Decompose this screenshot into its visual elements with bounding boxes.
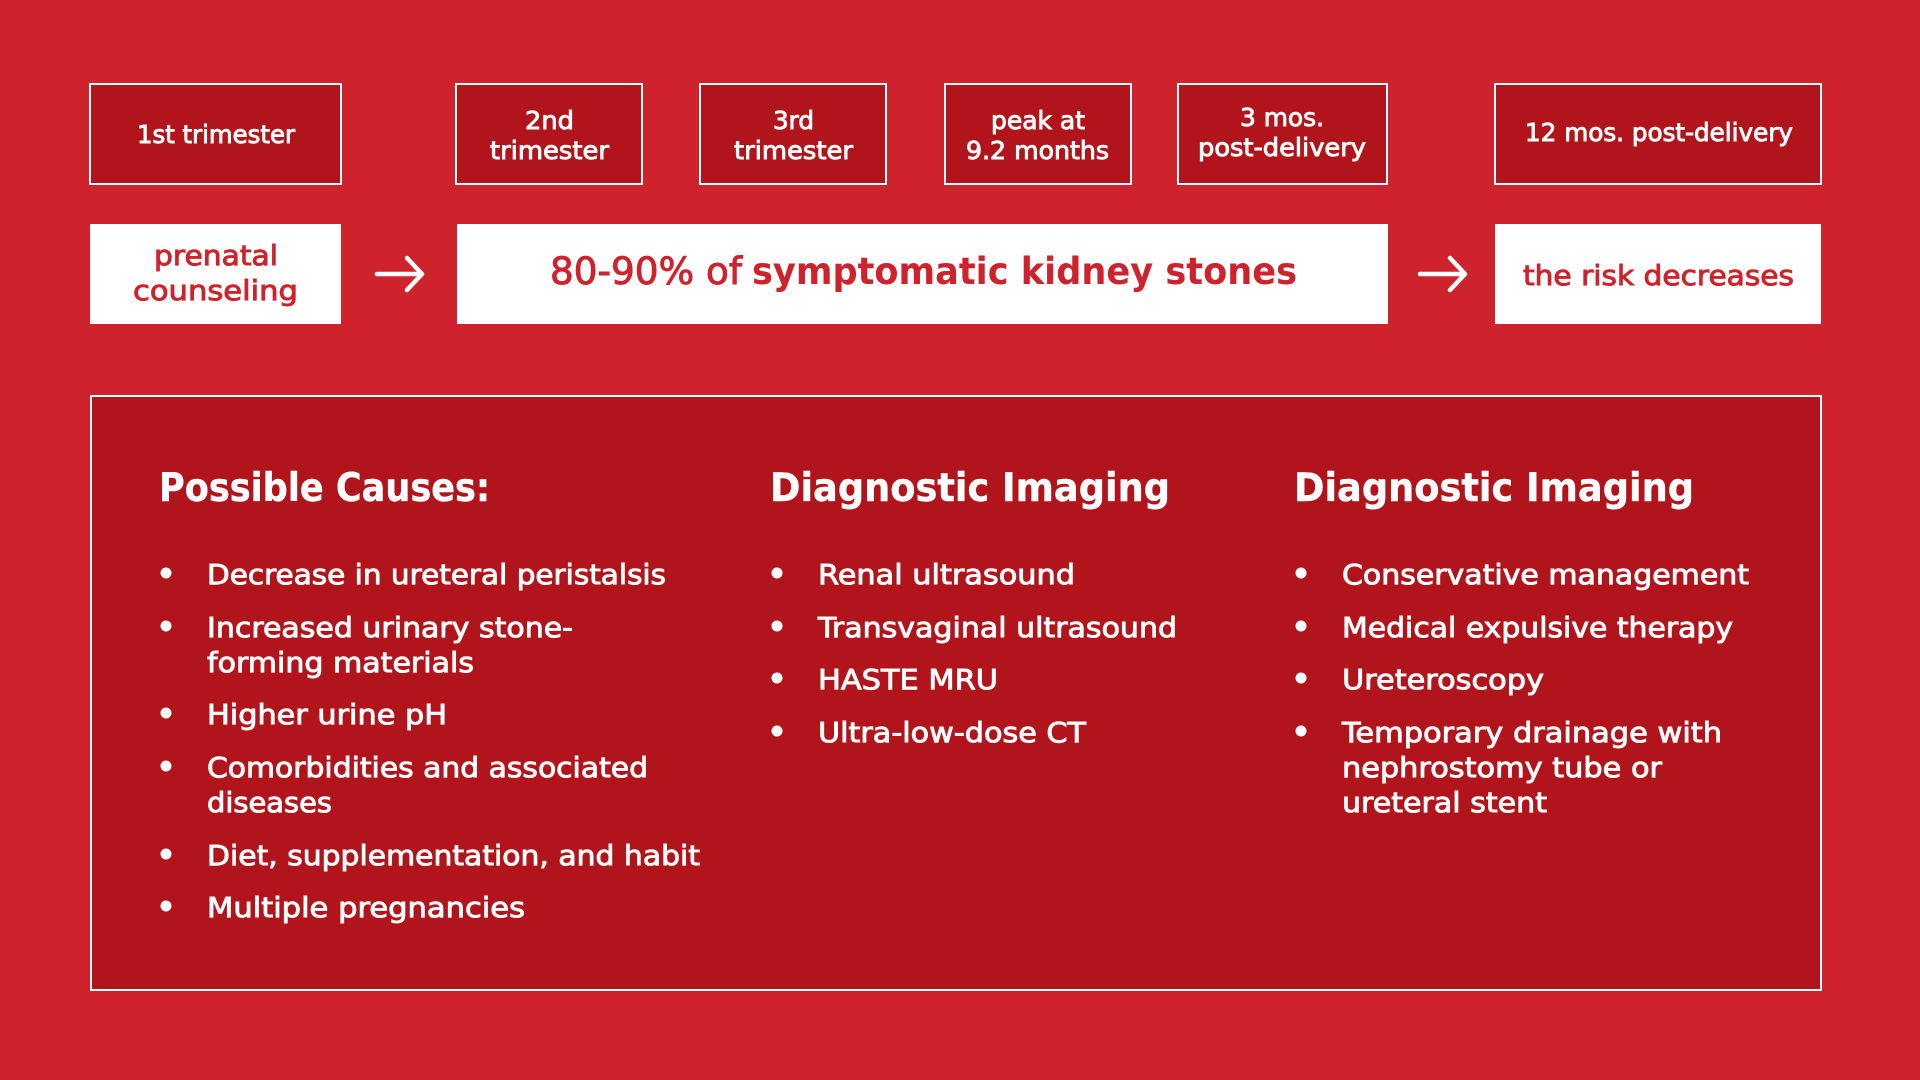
timeline label: 12 mos. post-delivery <box>1495 84 1821 184</box>
list: possible causes: Increased urinary stone- <box>207 611 573 644</box>
callout: 80-90% of symptomatic kidney stones <box>457 224 1388 324</box>
callout: the risk decreases: the risk decreases <box>1523 259 1794 292</box>
list: management options: Temporary drainage with <box>1341 716 1722 749</box>
callout: prenatal counseling: counseling <box>133 274 298 307</box>
timeline label: 1st trimester: 1st trimester <box>137 120 296 149</box>
heading: diagnostic imaging: Diagnostic Imaging <box>770 466 1170 511</box>
timeline label: peak at 9.2 months <box>945 84 1131 184</box>
arrow: counseling to symptomatic stones <box>377 258 422 290</box>
list: possible causes: Multiple pregnancies <box>207 891 525 924</box>
callout: 80-90% of symptomatic kidney stones: symptomatic kidney stones <box>752 250 1297 293</box>
callout: prenatal counseling <box>90 224 341 324</box>
list: imaging methods: Ultra-low-dose CT <box>818 716 1087 749</box>
list: possible causes <box>160 558 700 924</box>
list: management options: Conservative management <box>1342 558 1749 591</box>
callout: the risk decreases <box>1495 224 1821 324</box>
list: possible causes: Decrease in ureteral peristalsis <box>207 558 666 591</box>
list: management options: ureteral stent <box>1342 786 1547 819</box>
timeline label: 12 mos. post-delivery: 12 mos. post-delivery <box>1525 118 1793 147</box>
list: management options: nephrostomy tube or <box>1342 751 1663 784</box>
timeline label: 1st trimester <box>90 84 341 184</box>
timeline label: 3rd trimester <box>700 84 886 184</box>
list: imaging methods: Renal ultrasound <box>818 558 1075 591</box>
column: diagnostic imaging <box>770 466 1177 749</box>
list: possible causes: diseases <box>207 786 332 819</box>
list: possible causes: forming materials <box>207 646 474 679</box>
callout: 80-90% of symptomatic kidney stones: 80-90% of <box>550 250 743 293</box>
list: possible causes: Diet, supplementation, and habit <box>207 839 700 872</box>
timeline label: 3 mos. post-delivery <box>1178 84 1387 184</box>
panel: causes, imaging and management <box>91 396 1821 990</box>
timeline label: peak at 9.2 months: 9.2 months <box>966 136 1109 165</box>
timeline label: 2nd trimester <box>456 84 642 184</box>
heading: possible causes: Possible Causes: <box>159 466 490 511</box>
list: management options: Medical expulsive therapy <box>1342 611 1733 644</box>
list: possible causes: Higher urine pH <box>207 698 447 731</box>
timeline label: 3rd trimester: trimester <box>734 136 854 165</box>
list: management options <box>1296 558 1749 819</box>
list: management options: Ureteroscopy <box>1342 663 1544 696</box>
timeline label: 2nd trimester: trimester <box>490 136 610 165</box>
column: treatment <box>1294 466 1749 819</box>
timeline label: 3rd trimester: 3rd <box>773 106 814 135</box>
list: imaging methods <box>772 558 1177 749</box>
column: possible causes <box>159 466 700 924</box>
timeline label: 3 mos. post-delivery: post-delivery <box>1198 133 1366 162</box>
timeline label: peak at 9.2 months: peak at <box>991 106 1085 135</box>
heading: second diagnostic imaging: Diagnostic Imaging <box>1294 466 1694 511</box>
timeline label: 2nd trimester: 2nd <box>525 106 574 135</box>
list: imaging methods: HASTE MRU <box>818 663 998 696</box>
list: possible causes: Comorbidities and associated <box>207 751 648 784</box>
list: imaging methods: Transvaginal ultrasound <box>817 611 1177 644</box>
timeline label: 3 mos. post-delivery: 3 mos. <box>1240 103 1324 132</box>
arrow: symptomatic stones to risk decreases <box>1420 258 1465 290</box>
callout: prenatal counseling: prenatal <box>154 239 278 272</box>
